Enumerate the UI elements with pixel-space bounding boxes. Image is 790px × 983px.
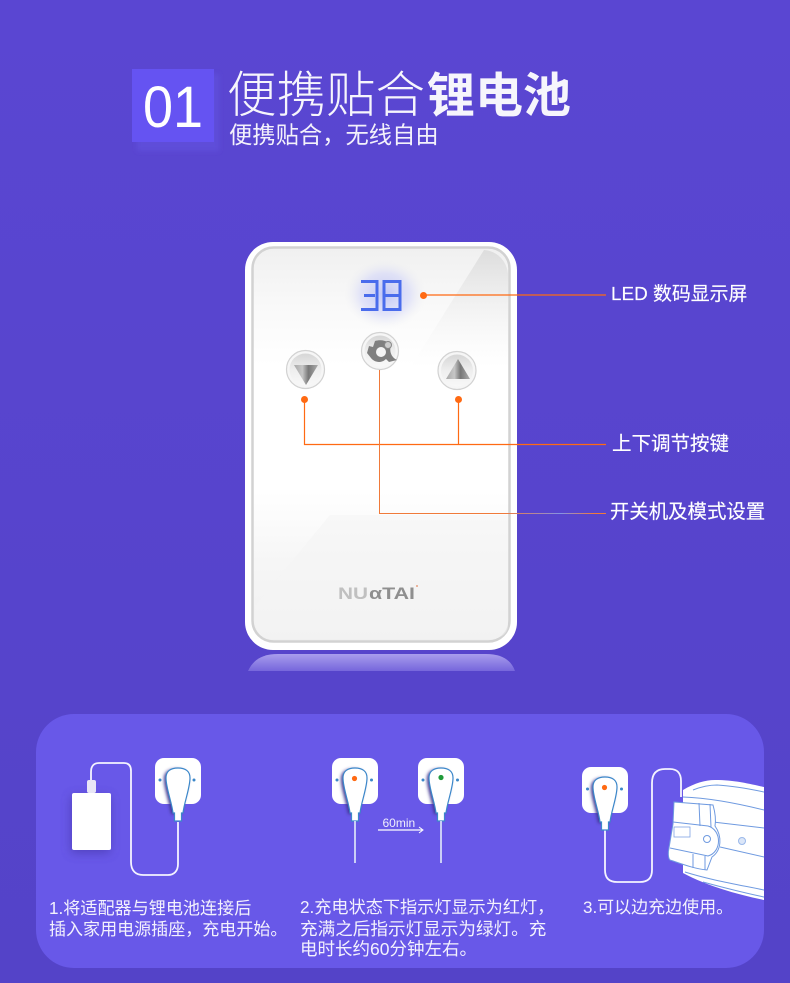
- callout: up/down keys: 上下调节按键: [612, 433, 729, 455]
- step 1 text: 插入家用电源插座，充电开始。: [49, 920, 287, 939]
- callout: LED display: LED 数码显示屏: [611, 283, 747, 305]
- step 1 text: 1.将适配器与锂电池连接后: [49, 899, 251, 918]
- step 1 illustration: [71, 758, 201, 875]
- arrow 60min: 60min: [382, 816, 415, 830]
- number badge: 01: [143, 75, 203, 140]
- brand logo: [338, 584, 418, 603]
- wall socket: [155, 758, 201, 804]
- battery pack: [71, 796, 110, 853]
- socket: full: [418, 758, 464, 863]
- step 2 text: 充满之后指示灯显示为绿灯。充: [300, 919, 546, 939]
- callout: up/down keys: [301, 396, 729, 455]
- step 2 text: [300, 897, 554, 959]
- title: 锂电池: [427, 70, 571, 123]
- step 1 text: [49, 899, 287, 939]
- LED display: [344, 259, 426, 329]
- step 3 text: 3.可以边充边使用。: [583, 897, 733, 917]
- waist belt: [668, 780, 764, 900]
- step 2 text: 2.充电状态下指示灯显示为红灯，: [300, 897, 554, 917]
- callout: LED display: [420, 283, 747, 305]
- step 2 illustration: [332, 758, 464, 863]
- button: up: [438, 352, 476, 390]
- title: 便携贴合: [227, 68, 425, 123]
- device: battery front view: [245, 242, 517, 671]
- reflection: [248, 654, 515, 671]
- button: down: [286, 350, 324, 388]
- outer white shell: [245, 242, 517, 650]
- cable: [91, 763, 178, 875]
- callout: power and mode: 开关机及模式设置: [610, 501, 765, 523]
- gloss: [405, 250, 508, 376]
- button: mode: [362, 332, 398, 370]
- heading block: [132, 68, 571, 151]
- panel: charging steps: [36, 714, 764, 968]
- brand logo: NU: [338, 584, 368, 603]
- socket: [582, 767, 628, 813]
- brand logo: αTAI: [369, 584, 415, 603]
- inner face: [252, 248, 510, 642]
- step 2 text: 电时长约60分钟左右。: [300, 939, 477, 959]
- number badge: [132, 69, 219, 151]
- subtitle: 便携贴合，无线自由: [229, 122, 439, 148]
- step 3 illustration: [582, 767, 764, 900]
- cable: [605, 769, 681, 882]
- socket: charging: [332, 758, 378, 863]
